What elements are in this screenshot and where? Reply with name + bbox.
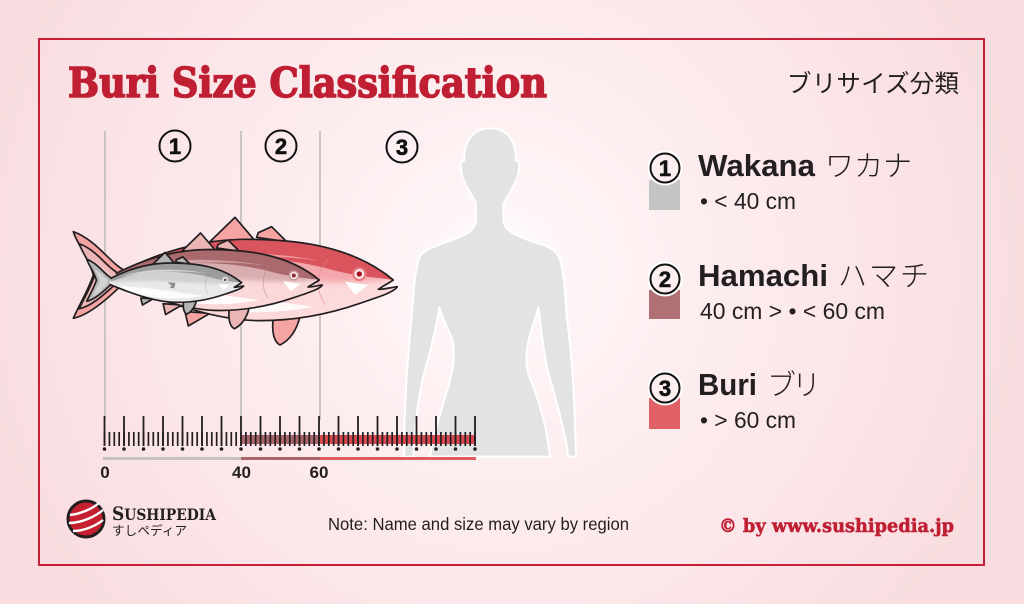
copyright: © by www.sushipedia.jp xyxy=(719,516,954,537)
number badge xyxy=(650,373,680,403)
japanese title: ブリサイズ分類 xyxy=(787,70,959,98)
number badge: 1 xyxy=(659,156,671,181)
column number 1 xyxy=(160,130,190,162)
human silhouette xyxy=(404,128,576,457)
fish: buri xyxy=(73,217,397,345)
swatch xyxy=(649,180,680,210)
title: Buri Size Classification xyxy=(68,59,547,107)
swatch xyxy=(649,398,680,429)
logo japanese: すしペディア xyxy=(112,523,187,538)
katakana: ワカナ xyxy=(825,151,912,183)
name: Wakana xyxy=(698,148,816,183)
ruler colour band xyxy=(241,435,476,444)
katakana: ブリ xyxy=(767,369,821,402)
katakana: ハマチ xyxy=(838,261,929,293)
scale labels: 40 xyxy=(232,463,251,482)
number badge xyxy=(650,153,680,183)
legend: wakana xyxy=(649,148,912,214)
logo xyxy=(68,501,217,538)
legend: hamachi xyxy=(649,258,929,324)
scale labels: 0 xyxy=(100,463,110,482)
size: 40 cm > • < 60 cm xyxy=(700,298,885,324)
ruler xyxy=(100,431,476,482)
note: Note: Name and size may vary by region xyxy=(328,514,629,534)
name: Buri xyxy=(698,367,757,402)
column number 1: 1 xyxy=(169,134,181,159)
logo wordmark: SUSHIPEDIA xyxy=(112,503,217,525)
column number 3: 3 xyxy=(396,135,408,160)
size: • < 40 cm xyxy=(700,188,796,214)
fish group xyxy=(73,217,397,345)
size guide lines xyxy=(105,131,320,420)
scale labels: 60 xyxy=(310,463,328,482)
legend: buri xyxy=(649,367,821,433)
logo mark xyxy=(68,501,104,537)
column number 2 xyxy=(266,130,296,162)
number badge: 3 xyxy=(659,376,671,401)
fish: wakana xyxy=(87,252,244,314)
column number 2: 2 xyxy=(275,134,287,159)
swatch xyxy=(649,290,680,319)
name: Hamachi xyxy=(698,258,828,293)
column number 3 xyxy=(386,132,418,162)
fish: hamachi xyxy=(79,233,322,329)
size: • > 60 cm xyxy=(700,407,796,433)
scale labels xyxy=(100,463,328,482)
scale bar xyxy=(103,457,476,460)
number badge: 2 xyxy=(659,267,671,292)
number badge xyxy=(650,264,680,294)
ruler ticks xyxy=(104,431,476,449)
